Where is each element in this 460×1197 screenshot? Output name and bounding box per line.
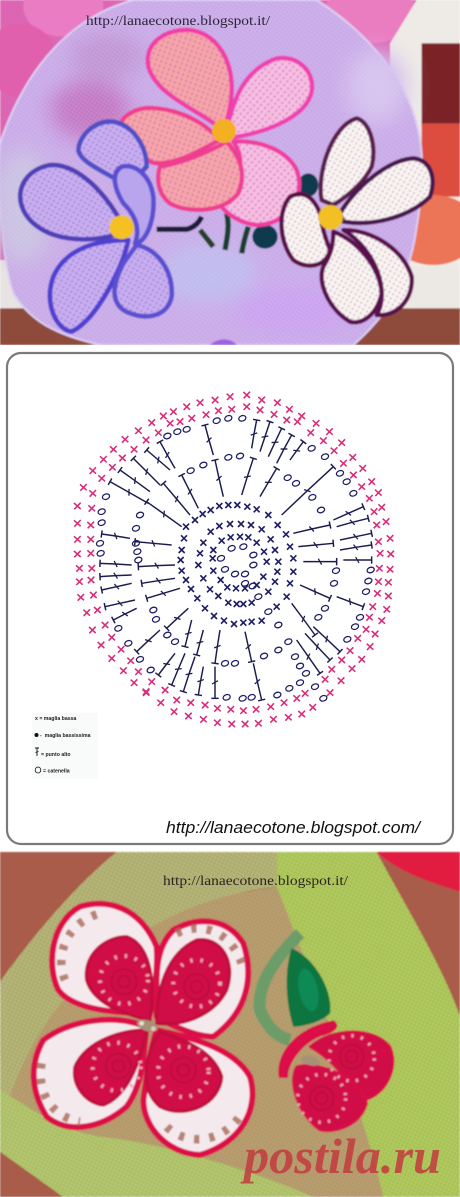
red tissue [377, 852, 460, 892]
dark leaves [252, 173, 318, 249]
legend: catenella: = catenella [43, 768, 70, 774]
watermark postila.ru: postila.ru [240, 1128, 441, 1184]
blue inner stitches [181, 505, 293, 624]
legend: punto alto: = punto alto [41, 752, 71, 758]
wall left [0, 260, 40, 310]
flower: white and plum [282, 118, 433, 322]
ribbon [210, 339, 237, 345]
panel: top photo of pink, purple and white crochet flowers [0, 0, 460, 352]
small flower beads [300, 1054, 321, 1068]
crochet chart [77, 395, 391, 724]
legend [32, 713, 98, 779]
small flower openings [298, 1036, 374, 1122]
flower: pink [122, 30, 312, 225]
panel: crochet diagram [7, 353, 453, 844]
legend: maglia bassissima: - maglia bassissima [40, 733, 91, 739]
right green mesh band [277, 852, 460, 1197]
panel frame [7, 353, 453, 844]
centre mesh [0, 887, 387, 1197]
spirals and openings of inner petals [93, 956, 220, 1097]
shelf and wall on the right [388, 0, 460, 345]
red outer stitches [77, 395, 391, 724]
chain ovals [100, 418, 371, 698]
small flower [280, 1022, 393, 1131]
bead centre [136, 1017, 159, 1034]
olive mesh band [0, 852, 277, 1097]
large flower inner petals [75, 937, 230, 1111]
stems [157, 213, 248, 253]
shaded patches under mesh [0, 33, 407, 333]
holes in white lace [41, 913, 242, 1139]
wood background [0, 852, 460, 1197]
legend: maglia bassa: x = maglia bassa [35, 716, 76, 722]
top photo url caption: http://lanaecotone.blogspot.it/ [86, 13, 270, 28]
bottom photo url caption: http://lanaecotone.blogspot.it/ [163, 873, 348, 888]
yarn balls [0, 0, 417, 97]
photo background: pink yarn [0, 0, 460, 345]
treble stitches [100, 420, 372, 700]
flower: purple [20, 122, 172, 332]
wood floor [0, 308, 460, 345]
faint legend background [32, 713, 98, 779]
diagram url caption: http://lanaecotone.blogspot.com/ [166, 818, 422, 837]
leaf [287, 948, 330, 1027]
purple mesh wrap [0, 0, 422, 345]
white strip below photo [0, 345, 460, 352]
large flower outer petals [34, 904, 253, 1155]
mesh texture [0, 0, 422, 345]
panel: bottom photo of red and white crochet flowers [0, 852, 460, 1197]
stem [260, 933, 300, 1040]
lower-left green mesh band [0, 1090, 313, 1197]
